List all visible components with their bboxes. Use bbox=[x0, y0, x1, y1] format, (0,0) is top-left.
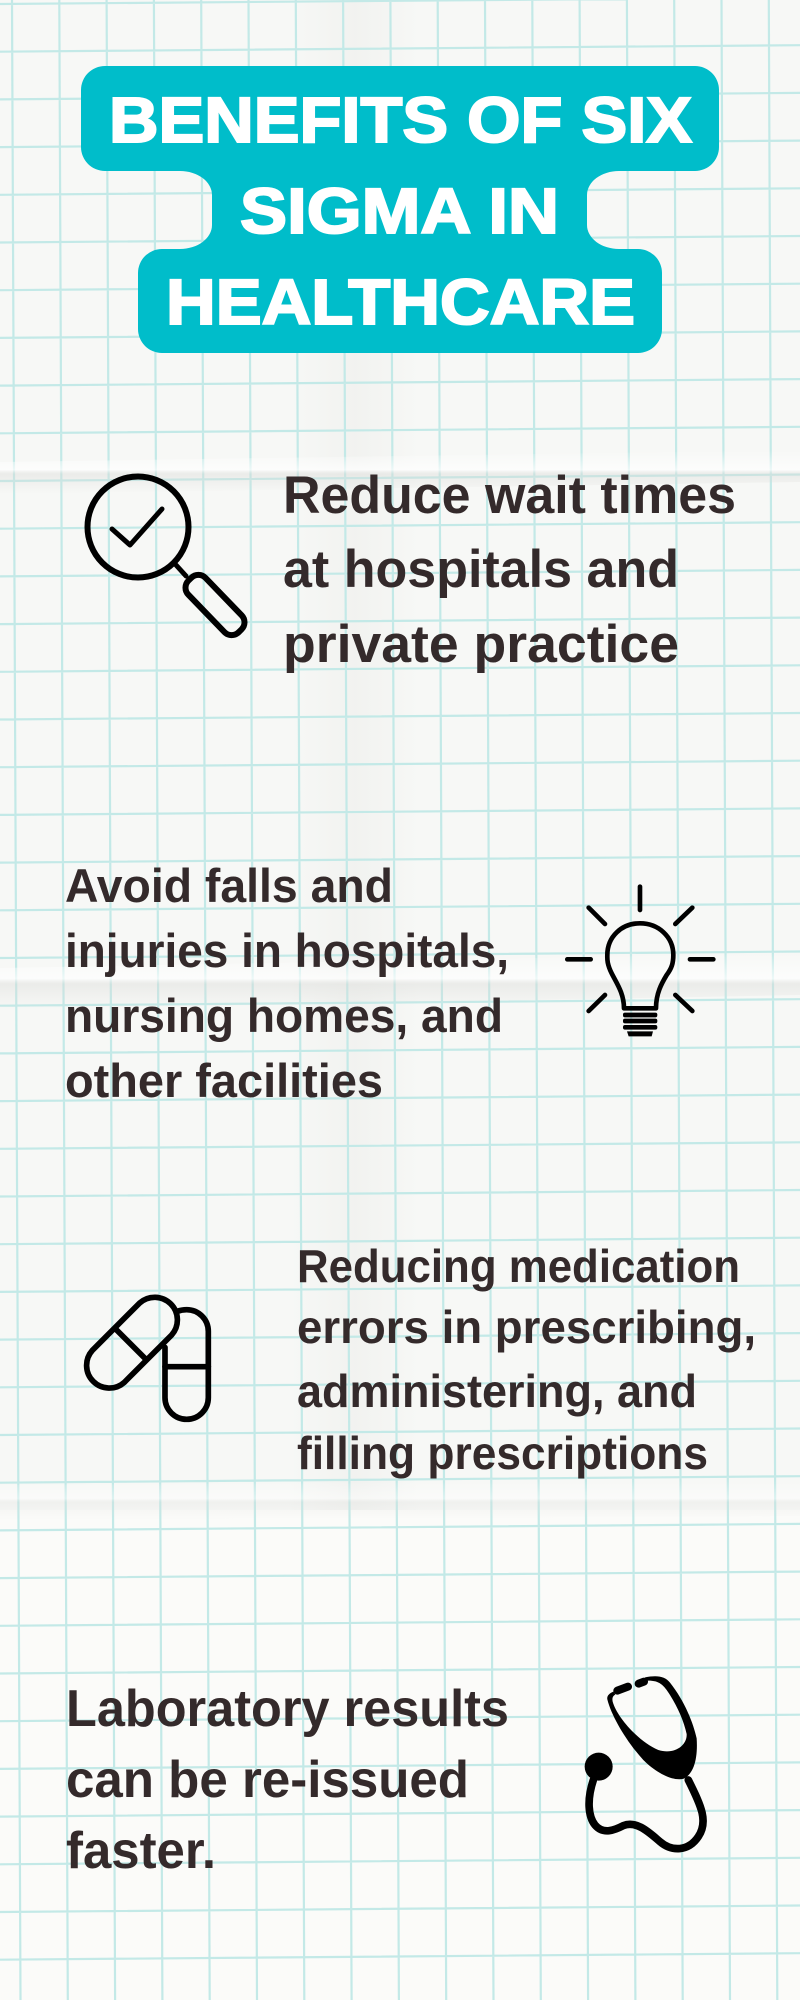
text: reduce wait times: Reduce wait times bbox=[283, 466, 736, 525]
title text: SIGMA IN bbox=[240, 175, 559, 247]
text: medication errors: Reducing medication bbox=[297, 1240, 740, 1292]
text: medication errors: filling prescriptions bbox=[297, 1427, 708, 1479]
text: laboratory results bbox=[66, 1680, 509, 1880]
text: avoid falls: other facilities bbox=[65, 1054, 383, 1107]
text: laboratory results: can be re-issued bbox=[66, 1751, 469, 1809]
title text bbox=[109, 84, 692, 338]
icon: magnifying glass with check mark bbox=[88, 476, 249, 639]
icon: capsule pills bbox=[87, 1297, 208, 1419]
title bbox=[81, 66, 719, 353]
icon: light bulb bbox=[567, 887, 713, 1036]
text: avoid falls: nursing homes, and bbox=[65, 989, 503, 1042]
text: reduce wait times: private practice bbox=[283, 615, 679, 674]
panel: laboratory results bbox=[66, 1676, 703, 1880]
title text: HEALTHCARE bbox=[166, 266, 635, 338]
text: avoid falls: injuries in hospitals, bbox=[65, 924, 509, 977]
text: reduce wait times: at hospitals and bbox=[283, 540, 679, 599]
text: medication errors bbox=[297, 1240, 756, 1479]
text: laboratory results: faster. bbox=[66, 1822, 216, 1880]
title background shape bbox=[81, 66, 719, 353]
text: avoid falls bbox=[65, 859, 509, 1107]
panel: medication errors bbox=[87, 1240, 756, 1479]
text: reduce wait times bbox=[283, 466, 736, 674]
text: laboratory results: Laboratory results bbox=[66, 1680, 509, 1738]
text: medication errors: administering, and bbox=[297, 1365, 697, 1417]
panel: reduce wait times bbox=[88, 466, 736, 674]
text: medication errors: errors in prescribing, bbox=[297, 1301, 756, 1353]
text: avoid falls: Avoid falls and bbox=[65, 859, 393, 912]
icon: stethoscope bbox=[585, 1676, 703, 1849]
title text: BENEFITS OF SIX bbox=[109, 84, 692, 156]
panel: avoid falls bbox=[65, 859, 713, 1107]
